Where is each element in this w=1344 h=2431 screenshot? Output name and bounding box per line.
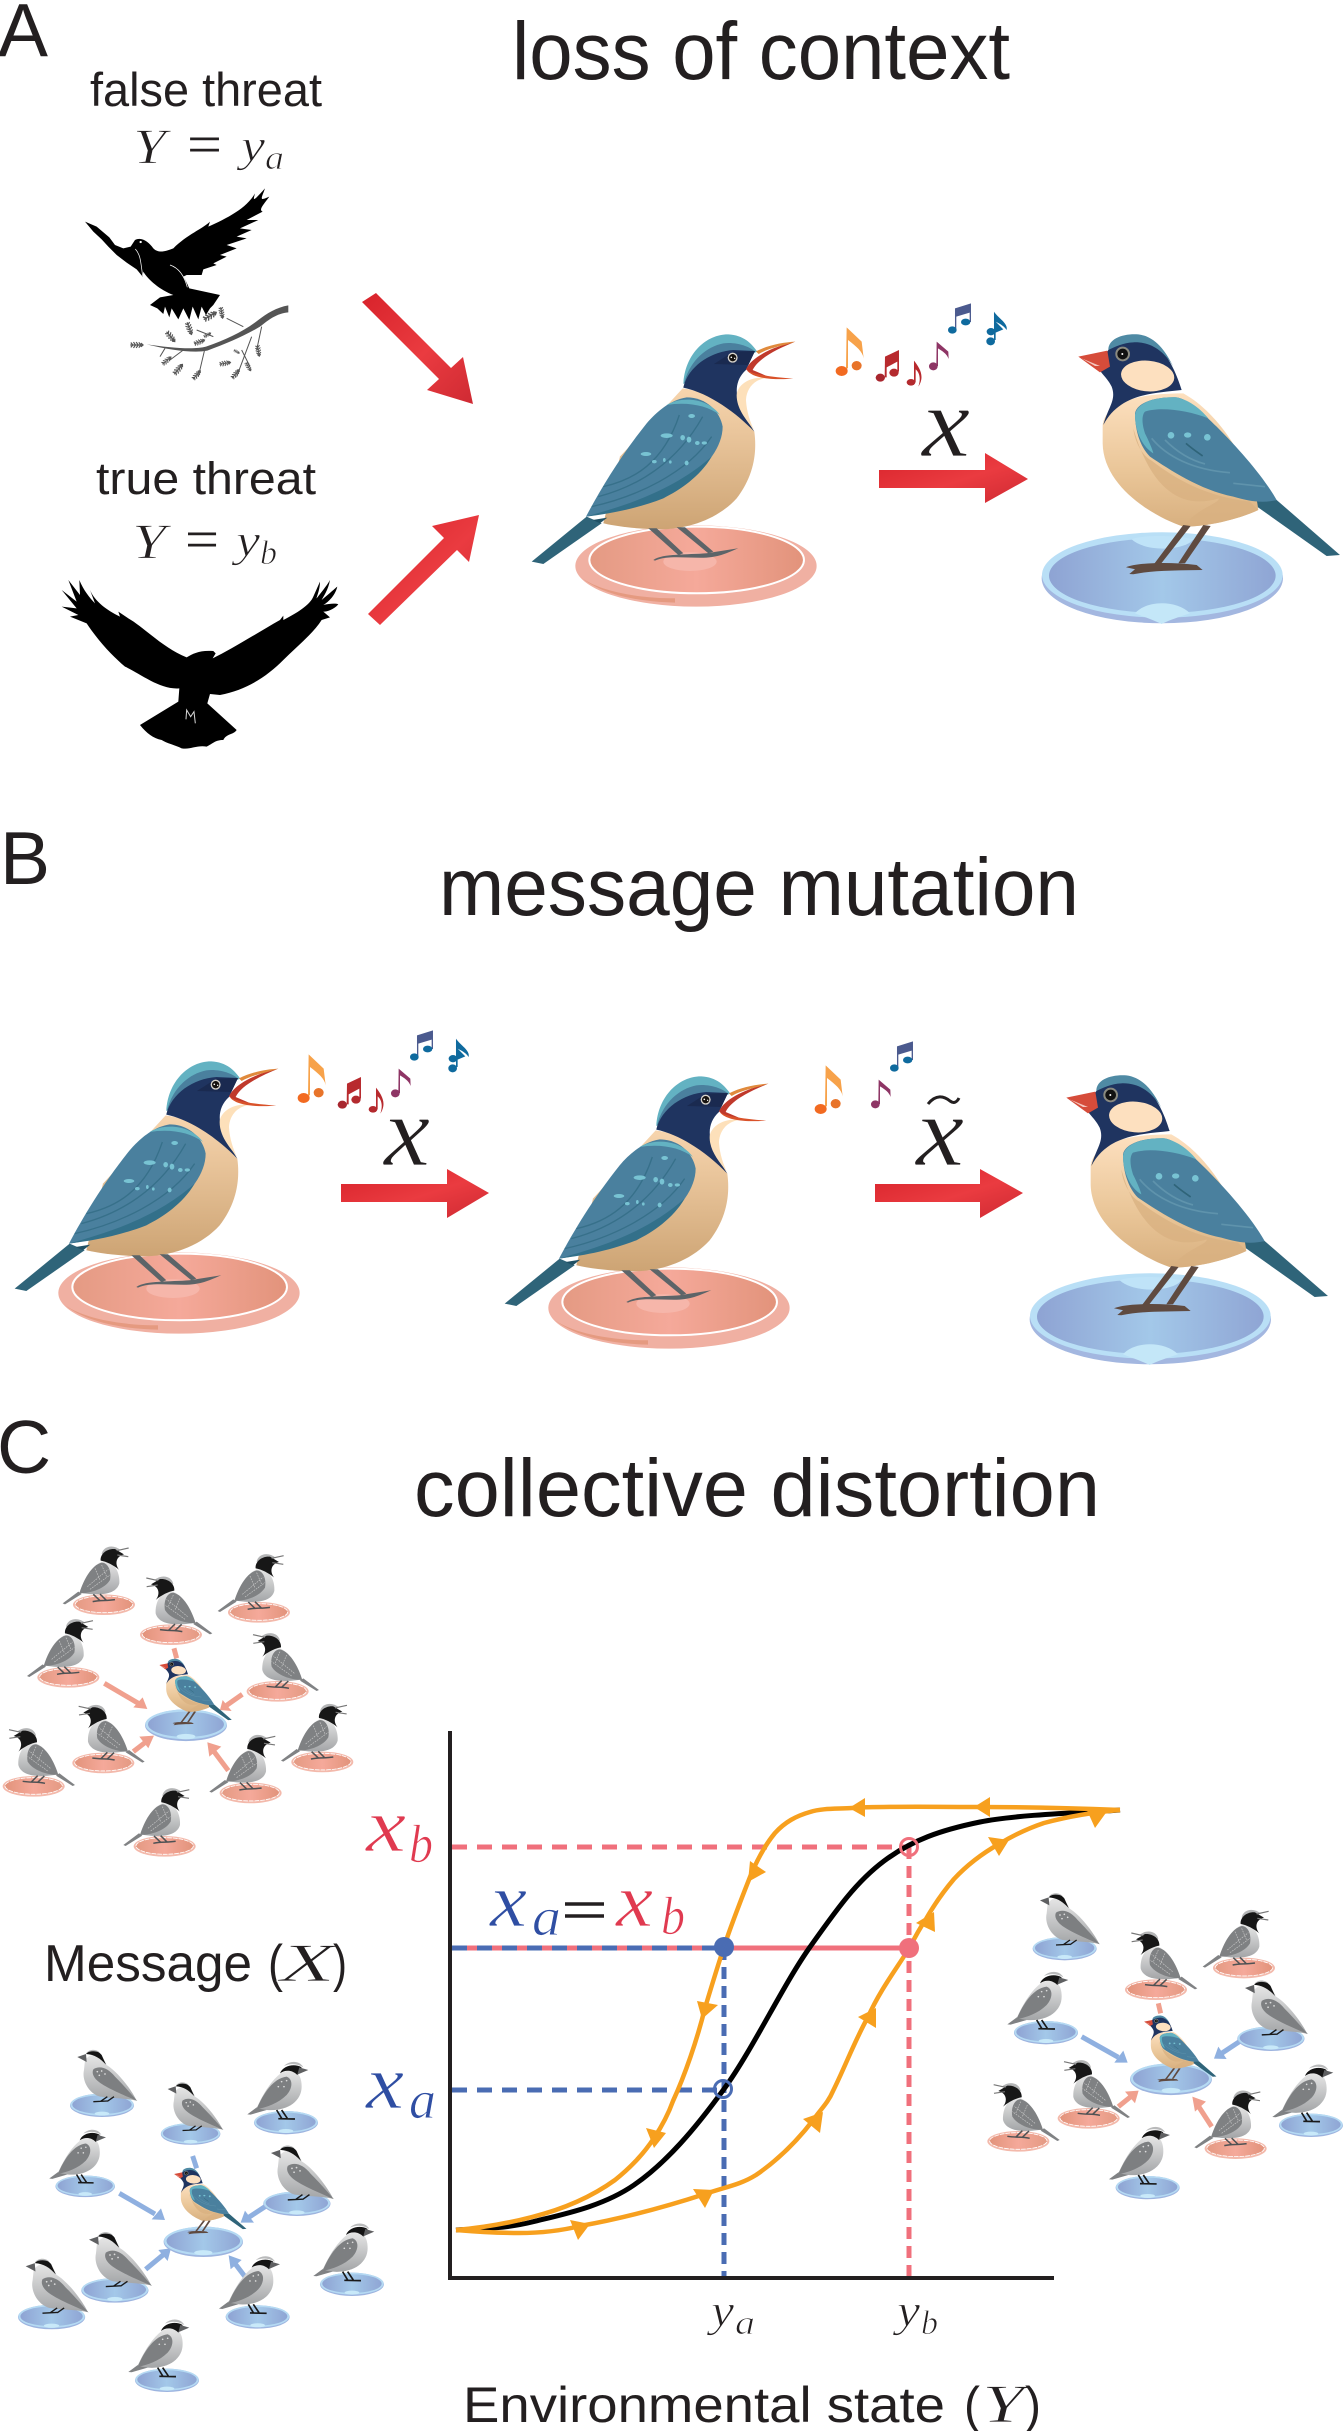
icon: eagle silhouette (62, 580, 338, 749)
label: Message (X): ( (268, 1935, 284, 1993)
bird: second singer (505, 1076, 790, 1349)
label: x_a = x_b (489, 1859, 685, 1947)
icon: music notes (836, 303, 1007, 387)
formula: Y = y_a: = (187, 114, 222, 176)
label: x_a = x_b: b (661, 1886, 685, 1946)
panel C: collective distortion (0, 1405, 1343, 2431)
formula: Y = y_b: Y (132, 513, 172, 569)
icon: dove silhouette on branch (85, 188, 288, 381)
panel A: loss of context (0, 0, 1340, 749)
icon: reduced set of notes (815, 1041, 913, 1114)
label: x_b: x (365, 1784, 406, 1868)
tick label: y_b (892, 2285, 938, 2342)
label: false threat: false threat (90, 63, 322, 116)
label: x_b (365, 1784, 433, 1874)
label: Message (X) (44, 1933, 347, 1993)
label: Message (X): Message (44, 1935, 252, 1993)
mutated message symbol x tilde: x (914, 1076, 964, 1187)
tick label: y_a: a (735, 2305, 755, 2342)
tick label: y_a: y (706, 2285, 735, 2336)
flock: mixed neighbours around listener (987, 1893, 1343, 2199)
branch (130, 305, 288, 381)
dove (85, 188, 269, 320)
formula: Y = y_a: Y (133, 118, 172, 174)
arrow: second transmission (875, 1169, 1023, 1218)
label: true threat: true threat (96, 453, 317, 504)
label: x_a = x_b: a (532, 1887, 561, 1947)
bird: listener on cool dish (1042, 334, 1340, 624)
heading: loss of context: loss of context (512, 6, 1010, 97)
bird: first singer (15, 1061, 300, 1334)
panel letter B: B (0, 816, 50, 900)
label: Message (X): ) (333, 1935, 347, 1993)
label: Message (X): X (277, 1933, 338, 1993)
formula: Y = y_a (133, 114, 284, 177)
black response curve (456, 1810, 1120, 2230)
icon: full set of notes (298, 1030, 469, 1114)
formula: Y = y_a: y (236, 120, 266, 171)
heading: message mutation: message mutation (439, 842, 1079, 933)
arrow: first transmission (341, 1169, 489, 1218)
panel B: message mutation (0, 816, 1328, 1365)
state markers (714, 1838, 919, 2098)
tick label: y_b: y (892, 2285, 921, 2336)
message symbol x: x (920, 367, 970, 478)
tick label: y_b: b (921, 2305, 938, 2342)
formula: Y = y_b: y (231, 515, 261, 566)
chart: environmental state vs message (365, 1731, 1120, 2431)
axes (450, 1731, 1054, 2278)
formula: Y = y_b (132, 509, 277, 572)
tick label: y_a (706, 2285, 755, 2342)
message symbol x: x (382, 1076, 430, 1187)
orange hysteresis loop (456, 1797, 1120, 2240)
bird: listener on cool dish (1030, 1075, 1328, 1365)
heading: collective distortion: collective distortion (414, 1443, 1100, 1534)
label: x_a (365, 2041, 436, 2130)
formula: Y = y_b: b (260, 535, 277, 572)
flock: cool majority around listener (18, 2050, 384, 2392)
formula: Y = y_b: = (185, 509, 219, 571)
label: x_a = x_b: x (489, 1859, 527, 1943)
arrow: false threat to singer (362, 293, 473, 404)
flock: warm majority around listener (3, 1547, 353, 1857)
label: x_a = x_b: x (615, 1859, 653, 1943)
bird: singer on warm dish (532, 334, 817, 607)
formula: Y = y_a: a (265, 140, 284, 177)
label: x_a: x (365, 2041, 404, 2125)
label: x_b: b (409, 1814, 433, 1874)
label: x_a: a (409, 2070, 436, 2130)
dashed guide lines (452, 1847, 909, 2278)
arrow: true threat to singer (368, 515, 479, 625)
arrow: message transmission (879, 453, 1028, 503)
